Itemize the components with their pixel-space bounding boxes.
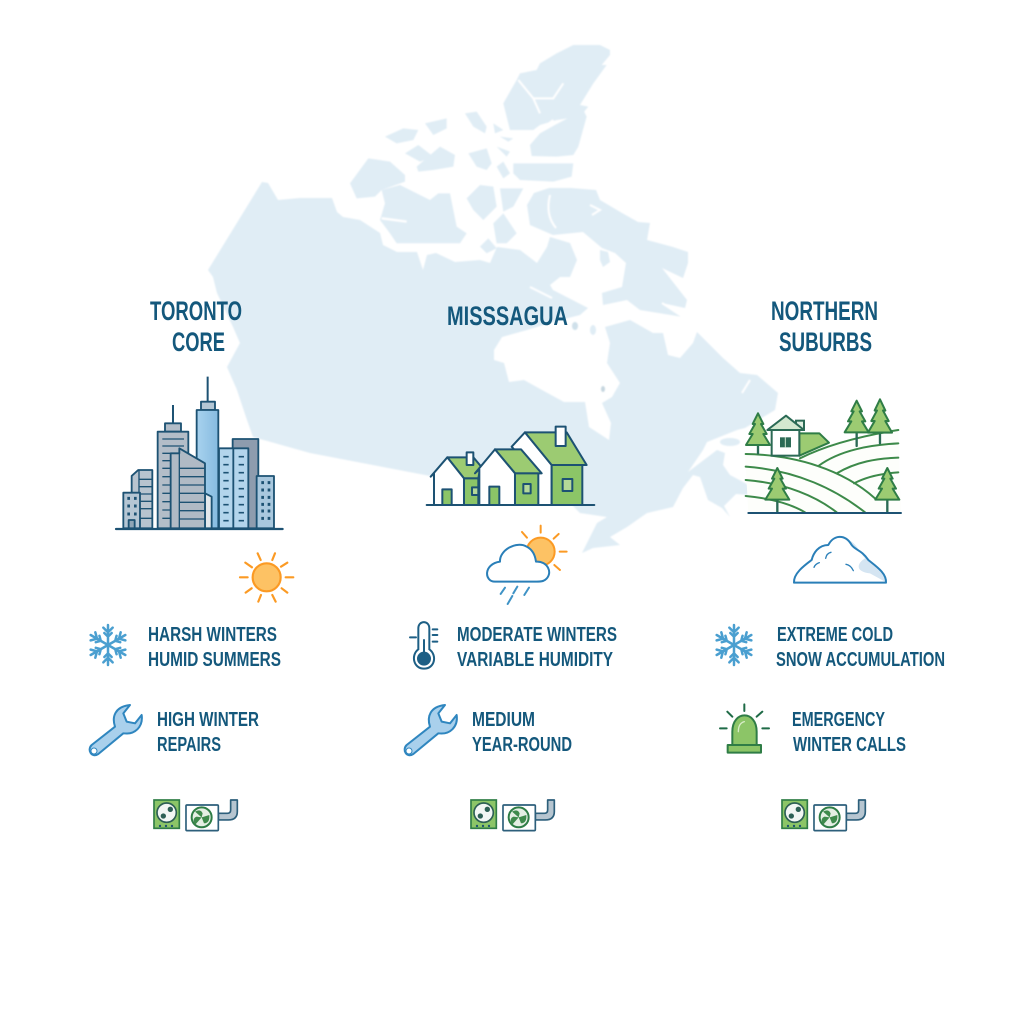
icon: snow cloud — [794, 537, 886, 583]
icon: HVAC units — [471, 800, 554, 831]
text: climate — [457, 623, 617, 671]
text: climate: MODERATE WINTERS — [457, 623, 617, 646]
heading: Northern Suburbs: NORTHERN — [771, 296, 878, 326]
text: climate: HUMID SUMMERS — [148, 648, 281, 671]
heading: Northern Suburbs: SUBURBS — [779, 327, 872, 357]
heading: Toronto Core: TORONTO — [150, 296, 242, 326]
text: climate: VARIABLE HUMIDITY — [457, 648, 613, 671]
icon: sun behind rain cloud — [487, 526, 567, 604]
heading: Misssagua: MISSSAGUA — [447, 301, 568, 331]
text: climate — [148, 623, 281, 671]
text: climate: EXTREME COLD — [777, 623, 893, 646]
text: service demand — [792, 708, 906, 756]
icon: sun — [240, 553, 293, 602]
text: climate: HARSH WINTERS — [148, 623, 277, 646]
icon: snowflake — [88, 625, 128, 665]
heading: Northern Suburbs — [771, 296, 878, 357]
icon: city skyline — [116, 377, 283, 529]
panel: Mississauga — [405, 301, 617, 831]
text: service demand: HIGH WINTER — [157, 708, 259, 731]
icon: HVAC units — [782, 800, 865, 831]
icon: wrench — [405, 705, 457, 755]
icon: houses — [427, 427, 594, 505]
text: service demand — [472, 708, 572, 756]
icon: thermometer — [410, 622, 437, 669]
icon: HVAC units — [154, 800, 237, 831]
panel: Northern Suburbs — [714, 296, 945, 831]
icon: snowflake — [714, 625, 754, 665]
background map of Canada — [208, 45, 778, 553]
text: climate — [776, 623, 945, 671]
text: service demand — [157, 708, 259, 756]
heading: Toronto Core: CORE — [172, 327, 225, 357]
text: service demand: YEAR-ROUND — [472, 733, 572, 756]
heading: Toronto Core — [150, 296, 242, 357]
text: service demand: EMERGENCY — [792, 708, 885, 731]
icon: wrench — [90, 705, 142, 755]
text: service demand: MEDIUM — [472, 708, 535, 731]
panel: Toronto Core — [88, 296, 293, 831]
text: service demand: REPAIRS — [157, 733, 221, 756]
icon: emergency siren — [720, 704, 769, 753]
icon: rural landscape — [745, 399, 901, 513]
text: climate: SNOW ACCUMULATION — [776, 648, 945, 671]
text: service demand: WINTER CALLS — [793, 733, 906, 756]
